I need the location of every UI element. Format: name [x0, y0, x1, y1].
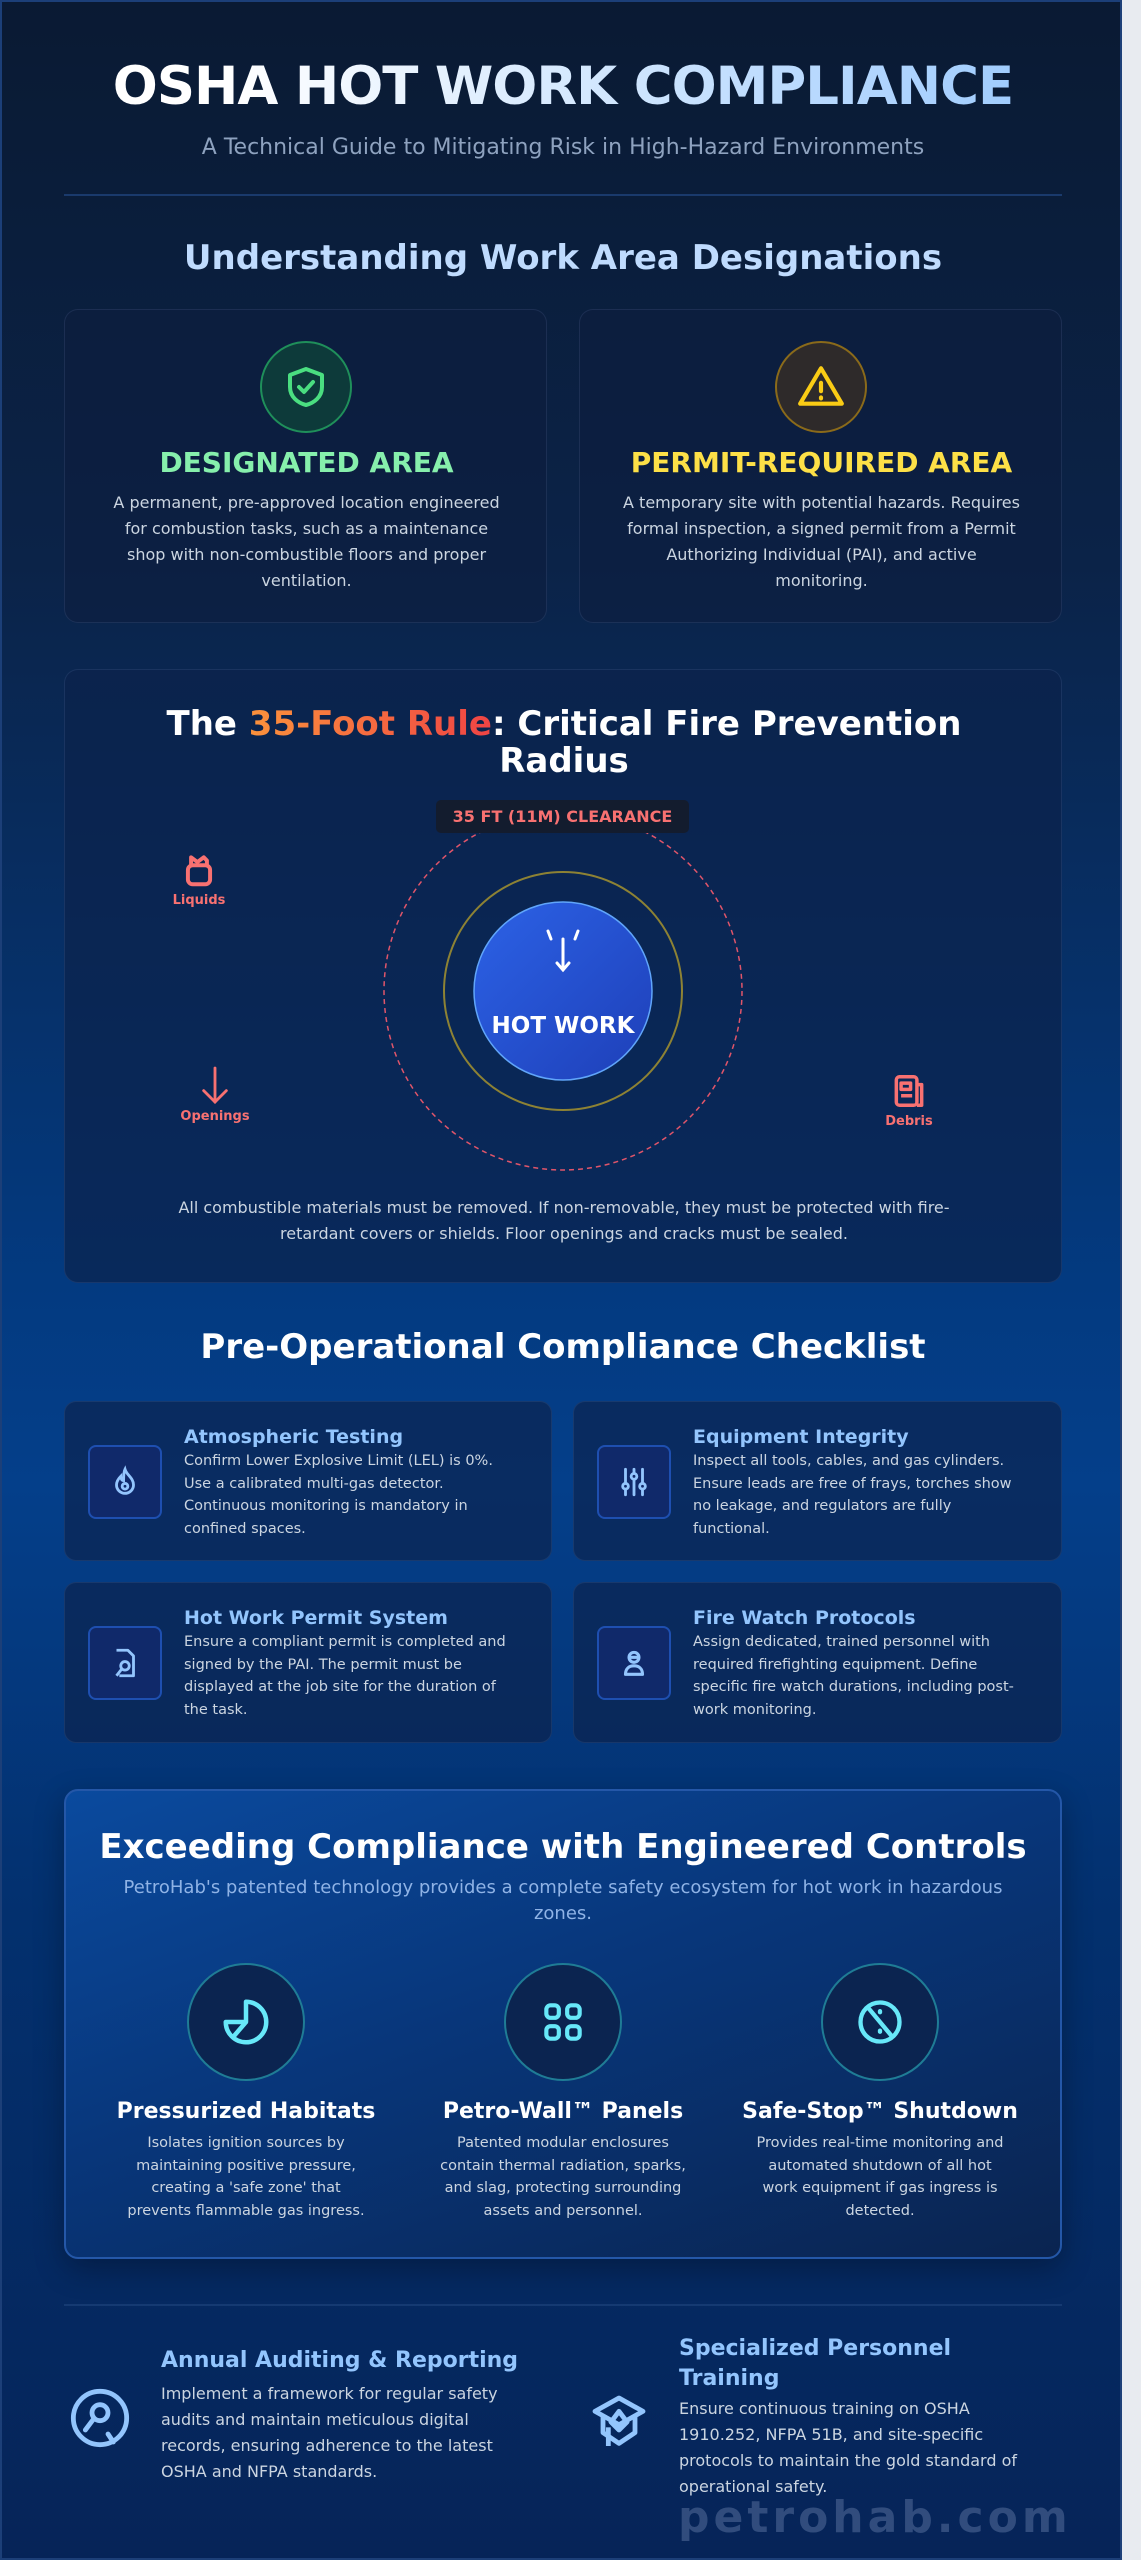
icon: liquids: [173, 855, 225, 908]
heading: The 35-Foot Rule: Critical Fire Prevention Radius: [166, 704, 961, 781]
block: annual auditing: [70, 2348, 518, 2481]
icon: flame: [88, 1445, 162, 1519]
checklist: atmospheric testing: Confirm Lower Explosive Limit (LEL) is 0%. Use a calibrated multi-gas detector. Continuous monitoring is mandatory in confined spaces.: [184, 1453, 493, 1536]
block: annual auditing: Implement a framework for regular safety audits and maintain meticulous digital records, ensuring adherence to the latest OSHA and NFPA standards.: [161, 2384, 498, 2481]
checklist: equipment integrity: [573, 1401, 1062, 1561]
icon: sliders: [597, 1445, 671, 1519]
checklist: permit system: Ensure a compliant permit is completed and signed by the PAI. The permit must be displayed at the job site for the duration of the task.: [184, 1634, 506, 1718]
panel: 35-foot rule: [64, 669, 1062, 1283]
text: formal inspection, a signed permit from a Permit: [627, 519, 1016, 538]
feature: petro-wall panels: [440, 1963, 686, 2218]
text: monitoring.: [775, 571, 868, 590]
text: [623, 493, 1020, 590]
text: A permanent, pre-approved location engineered: [113, 493, 500, 512]
text: shop with non-combustible floors and proper: [127, 545, 486, 564]
text: Authorizing Individual (PAI), and active: [666, 545, 977, 564]
subtitle: PetroHab's patented technology provides a complete safety ecosystem for hot work in hazardous zones.: [124, 1877, 1002, 1924]
icon: document: [88, 1626, 162, 1700]
badge: 35 FT (11M) CLEARANCE: [453, 807, 672, 826]
feature: safe-stop shutdown: [742, 1963, 1018, 2218]
checklist: permit system: Hot Work Permit System: [184, 1607, 448, 1629]
text: All combustible materials must be removed. If non-removable, they must be protected with fire-retardant covers or shields. Floor openings and cracks must be sealed.: [178, 1198, 950, 1243]
feature: safe-stop shutdown: automated shutdown of all hot: [768, 2158, 992, 2174]
feature: pressurized habitats: [117, 1963, 375, 2218]
heading: checklist: Pre-Operational Compliance Checklist: [200, 1327, 926, 1367]
heading: designated area: DESIGNATED AREA: [159, 446, 454, 479]
checklist: fire watch: Fire Watch Protocols: [693, 1607, 916, 1629]
checklist: atmospheric testing: Atmospheric Testing: [184, 1426, 403, 1448]
watermark: petrohab.com: [678, 2492, 1072, 2543]
checklist: atmospheric testing: [64, 1401, 552, 1561]
icon: shield: [260, 341, 352, 433]
title: OSHA HOT WORK COMPLIANCE: [113, 56, 1013, 117]
icon: debris: [885, 1075, 933, 1129]
icon: torch: [548, 931, 578, 970]
feature: safe-stop shutdown: detected.: [845, 2202, 915, 2218]
icon: liquids: Liquids: [173, 893, 225, 908]
checklist: equipment integrity: Equipment Integrity: [693, 1426, 909, 1448]
heading: work area designations: Understanding Work Area Designations: [184, 238, 942, 278]
diagram: radius: HOT WORK: [492, 1013, 636, 1039]
checklist: permit system: [64, 1582, 552, 1743]
icon: debris: Debris: [885, 1114, 933, 1129]
block: personnel training: Ensure continuous training on OSHA 1910.252, NFPA 51B, and site-specific protocols to maintain the gold standard of operational safety.: [679, 2399, 1017, 2496]
icon: openings: [180, 1066, 250, 1124]
text: for combustion tasks, such as a maintenance: [125, 519, 488, 538]
feature: pressurized habitats: maintaining positive pressure,: [136, 2158, 356, 2174]
badge: [436, 800, 689, 833]
text: [113, 493, 500, 590]
feature: petro-wall panels: Petro-Wall™ Panels: [443, 2099, 683, 2124]
feature: pressurized habitats: Pressurized Habitats: [117, 2099, 375, 2124]
text: A temporary site with potential hazards. Requires: [623, 493, 1020, 512]
panel: permit-required area: [579, 309, 1062, 623]
feature: petro-wall panels: Patented modular enclosures: [457, 2135, 669, 2151]
checklist: fire watch: [573, 1582, 1062, 1743]
heading: permit-required: PERMIT-REQUIRED AREA: [631, 446, 1012, 479]
feature: petro-wall panels: contain thermal radiation, sparks,: [440, 2158, 686, 2174]
text: ventilation.: [261, 571, 352, 590]
diagram: radius: [383, 800, 743, 1171]
icon: warning: [775, 341, 867, 433]
feature: safe-stop shutdown: Safe-Stop™ Shutdown: [742, 2099, 1018, 2124]
heading: Exceeding Compliance with Engineered Controls: [99, 1827, 1027, 1867]
feature: petro-wall panels: assets and personnel.: [483, 2202, 643, 2218]
feature: pressurized habitats: creating a 'safe zone' that: [151, 2180, 341, 2196]
block: annual auditing: Annual Auditing & Reporting: [161, 2348, 518, 2373]
checklist: equipment integrity: Inspect all tools, cables, and gas cylinders. Ensure leads are free of frays, torches show no leakage, and regulators are fully functional.: [693, 1453, 1012, 1536]
feature: petro-wall panels: and slag, protecting surrounding: [445, 2180, 681, 2196]
feature: pressurized habitats: Isolates ignition sources by: [147, 2135, 345, 2151]
icon: audit: [70, 2388, 130, 2448]
checklist: fire watch: Assign dedicated, trained personnel with required firefighting equipment. Define specific fire watch durations, including post-work monitoring.: [693, 1634, 1014, 1718]
icon: graduation cap: [592, 2396, 646, 2446]
feature: safe-stop shutdown: work equipment if gas ingress is: [762, 2180, 998, 2196]
icon: person: [597, 1626, 671, 1700]
block: personnel training: Specialized Personnel Training: [679, 2336, 951, 2391]
subtitle: A Technical Guide to Mitigating Risk in High-Hazard Environments: [202, 135, 924, 160]
feature: pressurized habitats: prevents flammable gas ingress.: [127, 2202, 365, 2218]
block: personnel training: [592, 2336, 1018, 2496]
feature: safe-stop shutdown: Provides real-time monitoring and: [756, 2135, 1004, 2151]
panel: designated area: [64, 309, 547, 623]
panel: engineered controls: [64, 1789, 1062, 2259]
icon: openings: Openings: [180, 1109, 250, 1124]
